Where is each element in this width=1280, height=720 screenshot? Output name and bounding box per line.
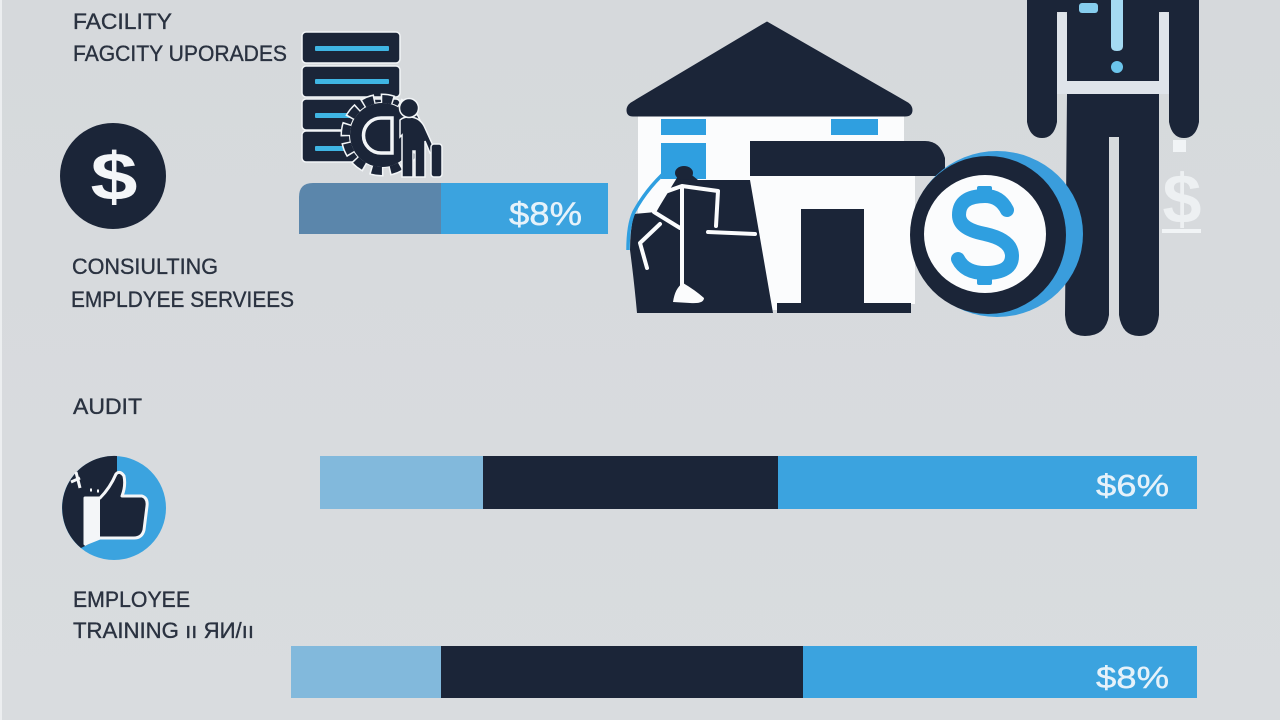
- heading: employee training: TRAINING ıı ЯИ/ıı: [73, 618, 254, 643]
- house roof: [627, 22, 912, 116]
- heading: facility upgrades: FAGCITY UPORADES: [73, 41, 287, 66]
- icon: dollar circle: $: [90, 139, 138, 215]
- bar: employee training 86%: [291, 646, 1197, 698]
- heading: employee training: EMPLOYEE: [73, 587, 190, 612]
- tie: [1111, 0, 1123, 51]
- icon: dollar circle: [60, 123, 166, 229]
- icon: server rows: [302, 32, 400, 162]
- torso: [1057, 0, 1169, 12]
- icon: thumbs up circle: [62, 456, 166, 560]
- faint dollar sign: $: [1163, 160, 1201, 238]
- icon: house with coin: [627, 22, 1083, 317]
- dark machine silhouette: [628, 166, 773, 313]
- coin: [910, 151, 1083, 317]
- trousers: [1065, 94, 1159, 336]
- arms: [1027, 0, 1057, 138]
- icon: worker figure: [400, 98, 442, 177]
- heading: consulting employee services: [71, 254, 294, 312]
- lower wall: [750, 176, 915, 304]
- heading: audit: AUDIT: [73, 394, 142, 419]
- icon: standing person: [1027, 0, 1199, 336]
- icon: server stack with gear and worker: [302, 32, 442, 177]
- house walls: [638, 110, 904, 310]
- heading: consulting employee services: CONSIULTING: [72, 254, 218, 279]
- button: [1111, 61, 1123, 73]
- bar: audit 86%: $6%: [1096, 468, 1169, 503]
- heading: consulting employee services: EMPLDYEE SERVIEES: [71, 287, 294, 312]
- heading: facility upgrades: FACILITY: [73, 9, 172, 34]
- bar: employee training 86%: $8%: [1096, 660, 1169, 695]
- pocket: [1079, 3, 1098, 13]
- bar: audit 86%: [320, 456, 1197, 509]
- garage awning: [750, 141, 945, 176]
- heading: employee training: [73, 587, 254, 643]
- bar: facility upgrades 88%: $8%: [509, 196, 582, 232]
- house windows: [661, 119, 878, 179]
- belt gap: [1057, 81, 1169, 94]
- bar: facility upgrades 88%: [299, 183, 608, 234]
- icon: gear: [346, 99, 418, 171]
- heading: facility upgrades: [73, 9, 287, 66]
- door: [777, 209, 911, 313]
